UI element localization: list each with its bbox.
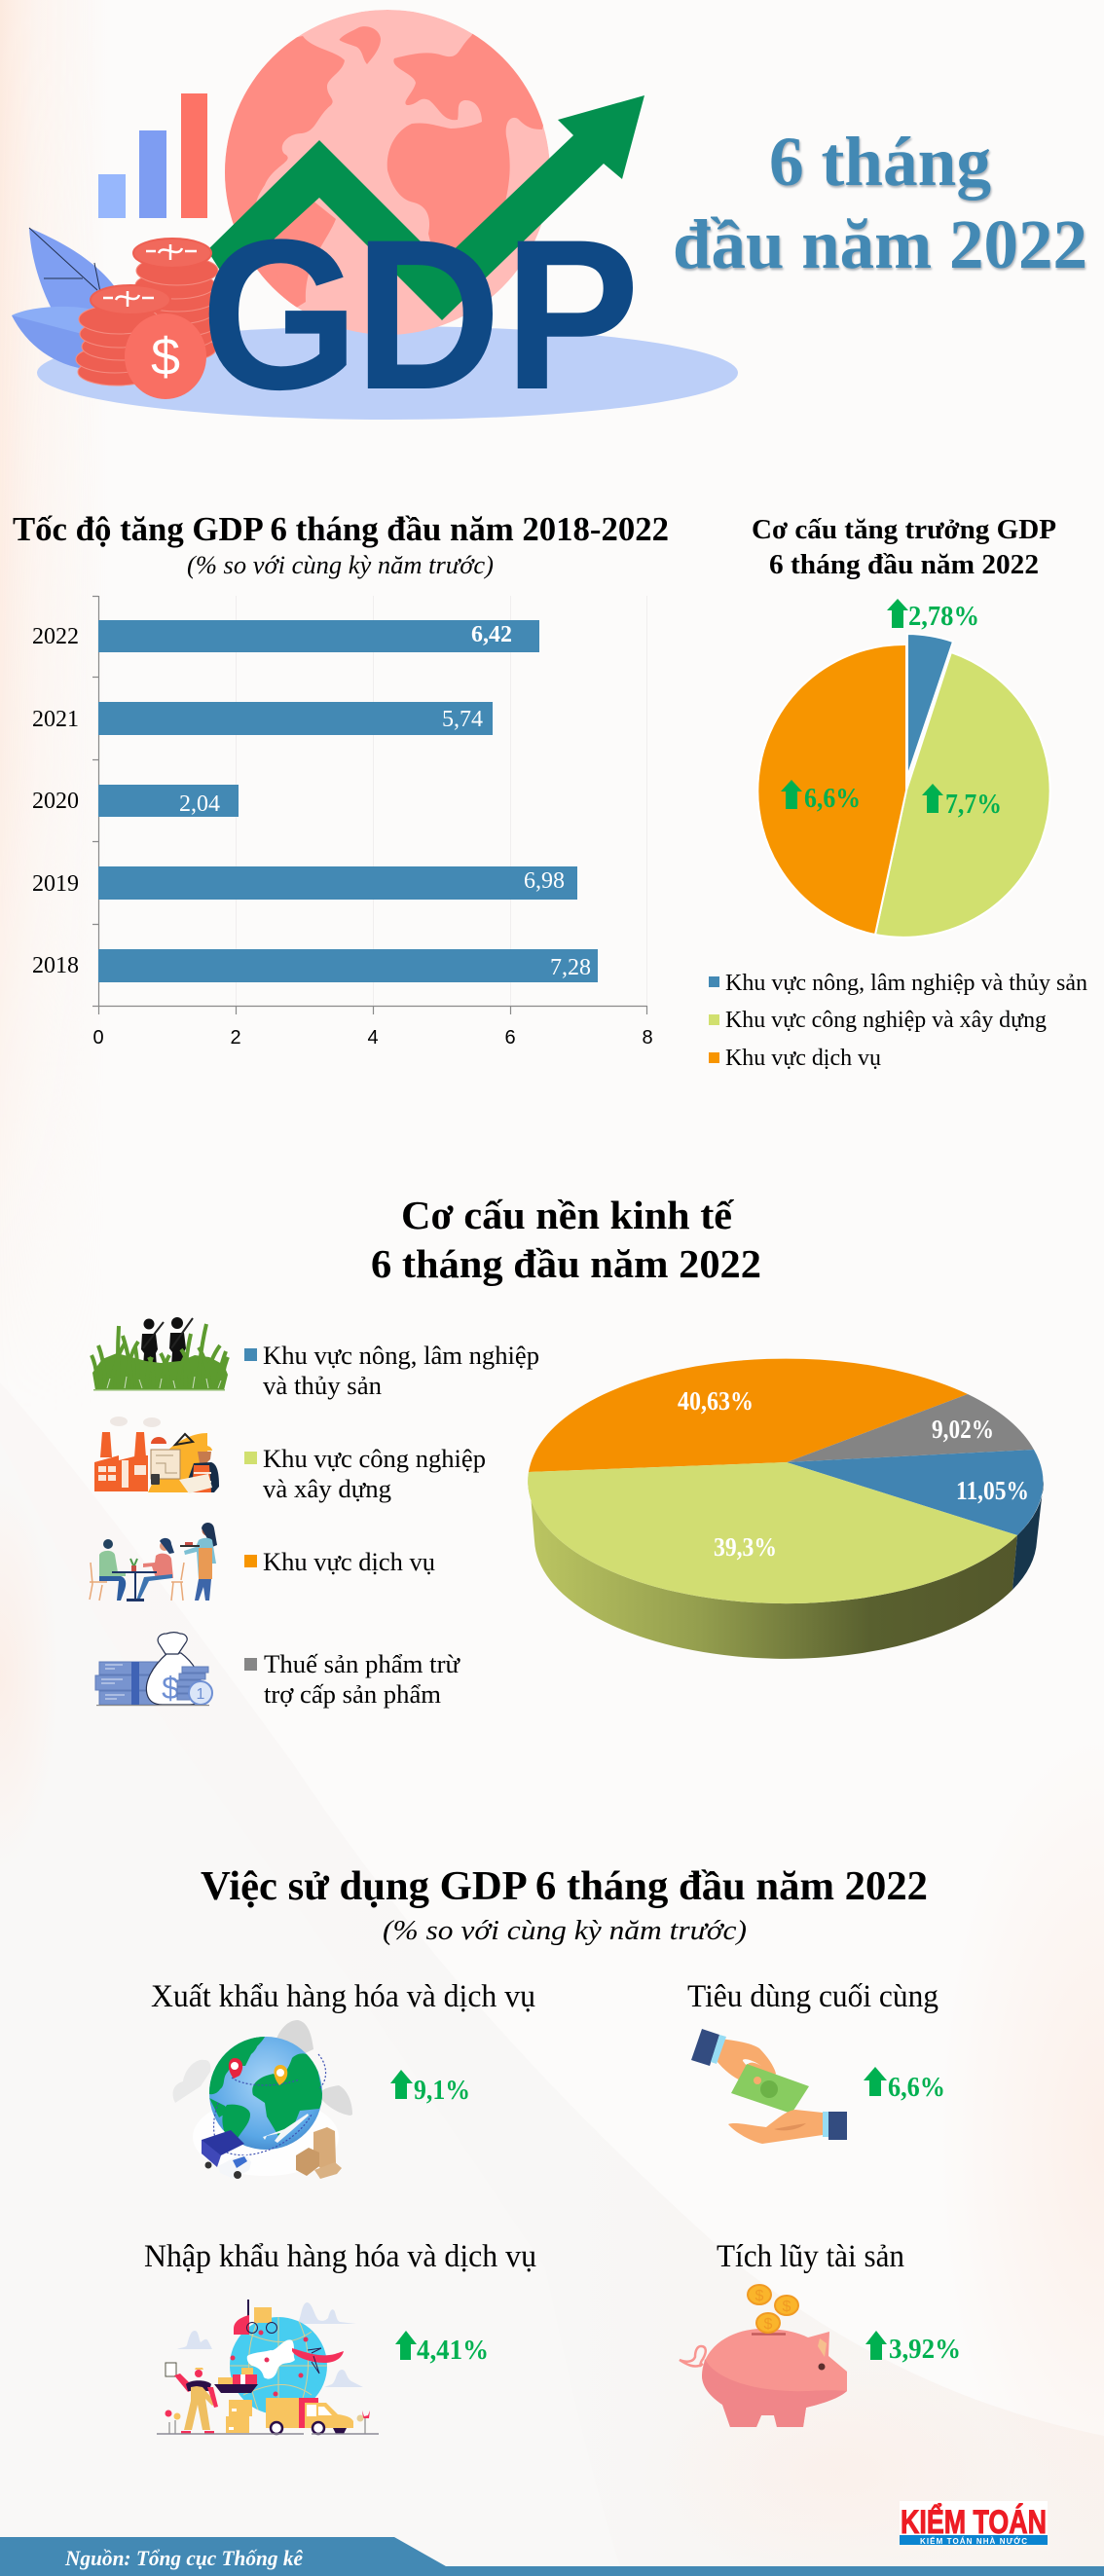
icon: base ellipse [37, 326, 738, 420]
title: đầu năm 2022 [673, 205, 1087, 283]
value labels: 11,05% [956, 1476, 1029, 1505]
value: exports: 9,1% [414, 2075, 470, 2106]
slice: services [529, 1359, 968, 1472]
icon: leaves [12, 228, 134, 370]
value: exports [390, 2070, 470, 2106]
heading: Cơ cấu tăng trưởng GDP [752, 515, 1056, 545]
year labels: 2018 [32, 953, 79, 978]
item heading: exports: Xuất khẩu hàng hóa và dịch vụ [151, 1979, 535, 2014]
legend: agriculture: Khu vực nông, lâm nghiệp [263, 1342, 539, 1370]
GDP lettering: GDP [201, 196, 640, 434]
icon: GDP hero illustration [12, 10, 738, 434]
icon: global logistics scene [157, 2300, 379, 2434]
value labels [678, 1386, 1029, 1562]
legend: product taxes: Thuế sản phẩm trừ [264, 1650, 460, 1678]
legend: Khu vực nông, lâm nghiệp và thủy sản [725, 971, 1087, 996]
subheading: (% so với cùng kỳ năm trước) [187, 551, 494, 579]
icon: globe with truck and parcels [173, 2020, 352, 2179]
value: imports [395, 2331, 489, 2366]
icon: money bag and cash: 1 [197, 1686, 205, 1703]
value labels: 7,28 [550, 955, 591, 980]
year labels [32, 624, 79, 978]
gridlines and axes [92, 596, 646, 1014]
value labels: 6,98 [524, 868, 565, 894]
icon: piggy bank with coins: $ [783, 2299, 791, 2315]
heading: Cơ cấu nền kinh tế [401, 1193, 735, 1237]
heading: Tốc độ tăng GDP 6 tháng đầu năm 2018-2022 [13, 510, 669, 548]
slice: product taxes [787, 1394, 1034, 1462]
value labels: 5,74 [442, 707, 483, 732]
item heading: imports: Nhập khẩu hàng hóa và dịch vụ [144, 2239, 536, 2274]
legend: agriculture: và thủy sản [263, 1372, 382, 1400]
icon: money bag and cash: $ [162, 1671, 179, 1706]
logo: Kiểm toán [900, 2501, 1048, 2546]
icon: people at a cafe [90, 1523, 217, 1601]
year labels: 2022 [32, 624, 79, 649]
icon: coins: $ [151, 328, 180, 386]
panel: growth structure pie: 6 tháng đầu năm 2022 [769, 550, 1039, 580]
legend: product taxes [244, 1650, 460, 1709]
year labels: 2021 [32, 707, 79, 732]
logo: Kiểm toán: KIỂM TOÁN NHÀ NƯỚC [920, 2537, 1027, 2546]
panel: GDP use [144, 1864, 961, 2434]
axis labels: 2 [230, 1027, 241, 1049]
item heading: asset accumulation: Tích lũy tài sản [717, 2239, 904, 2274]
legend: product taxes: trợ cấp sản phẩm [264, 1680, 441, 1709]
value 7,7% [922, 784, 1002, 820]
value: final consumption: 6,6% [888, 2072, 945, 2103]
axis labels: 0 [92, 1027, 104, 1049]
pie chart [757, 634, 1050, 938]
value 7,7%: 7,7% [945, 789, 1002, 820]
value labels: 40,63% [678, 1386, 754, 1416]
footer band [0, 2537, 1104, 2576]
legend [709, 971, 1087, 1071]
3D side [528, 1472, 1017, 1659]
slice: industry [528, 1462, 1017, 1603]
value: final consumption [864, 2067, 945, 2103]
legend: industry: và xây dựng [263, 1475, 391, 1503]
value 6,6%: 6,6% [804, 783, 861, 814]
value: asset accumulation: 3,92% [889, 2334, 961, 2365]
icon: money bag and cash [95, 1632, 212, 1706]
title [673, 123, 1087, 283]
panel: growth structure pie [709, 515, 1087, 1071]
chart: 3D pie [528, 1359, 1044, 1659]
slice: agriculture [787, 1450, 1043, 1535]
icon: coins [76, 239, 218, 399]
icon: bar columns [98, 93, 207, 218]
value 2,78%: 2,78% [908, 601, 979, 632]
value labels: 6,42 [471, 622, 512, 647]
panel: economic structure [90, 1193, 1044, 1709]
value: imports: 4,41% [417, 2335, 489, 2366]
legend: industry: Khu vực công nghiệp [263, 1445, 486, 1473]
icon: globe [225, 10, 549, 335]
value labels: 39,3% [714, 1532, 777, 1562]
value 6,6% [781, 780, 861, 814]
value labels: 2,04 [179, 791, 220, 817]
title: 6 tháng [769, 123, 991, 201]
value 2,78% [887, 599, 979, 632]
legend: services: Khu vực dịch vụ [263, 1548, 435, 1576]
value labels: 9,02% [932, 1415, 994, 1444]
value labels [179, 622, 591, 980]
bars [98, 620, 598, 982]
source note: Nguồn: Tổng cục Thống kê [64, 2546, 303, 2570]
icon: arrow [207, 95, 644, 320]
axis labels: 4 [367, 1027, 379, 1049]
subheading: (% so với cùng kỳ năm trước) [383, 1915, 747, 1946]
icon: piggy bank with coins [680, 2285, 847, 2427]
icon: piggy bank with coins: $ [764, 2316, 773, 2333]
axis labels: 6 [504, 1027, 516, 1049]
legend: agriculture [244, 1342, 539, 1400]
axis labels [92, 1027, 653, 1049]
heading: Việc sử dụng GDP 6 tháng đầu năm 2022 [201, 1864, 928, 1909]
item heading: final consumption: Tiêu dùng cuối cùng [687, 1979, 938, 2014]
panel: economic structure: 6 tháng đầu năm 2022 [371, 1241, 761, 1286]
icon: factory and engineer [94, 1417, 219, 1493]
icon: farm workers in corn field [92, 1317, 228, 1390]
icon: hands exchanging money [691, 2029, 847, 2144]
legend: Khu vực công nghiệp và xây dựng [725, 1008, 1047, 1033]
logo: Kiểm toán: KIỂM TOÁN [901, 2504, 1047, 2541]
value: asset accumulation [865, 2331, 961, 2365]
icon: piggy bank with coins: $ [755, 2288, 764, 2304]
axis labels: 8 [642, 1027, 653, 1049]
year labels: 2020 [32, 789, 79, 814]
panel: GDP growth bar chart [13, 510, 669, 1049]
legend: Khu vực dịch vụ [725, 1046, 881, 1071]
year labels: 2019 [32, 871, 79, 897]
legend: industry [244, 1445, 486, 1503]
